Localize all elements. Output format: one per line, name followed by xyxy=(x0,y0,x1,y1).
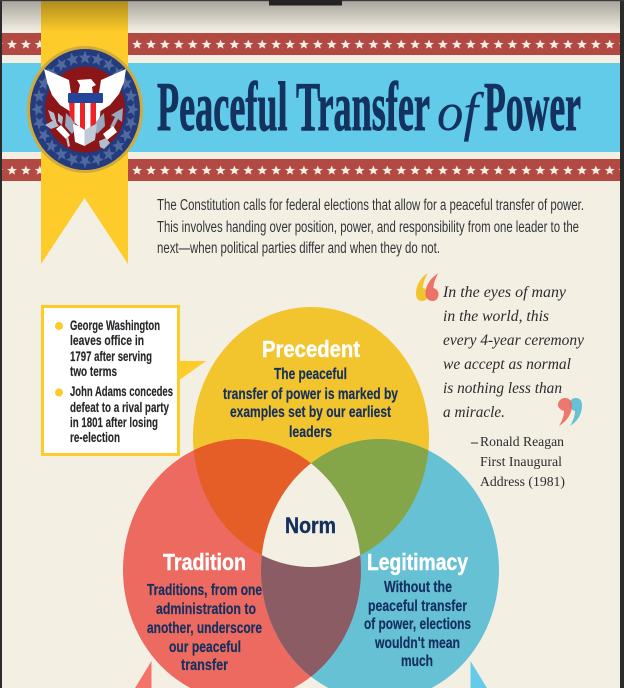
left wing xyxy=(44,69,71,112)
legitimacy text: much xyxy=(401,653,433,670)
legitimacy text: of power, elections xyxy=(364,616,471,633)
eagle xyxy=(44,69,126,149)
bullet: Adams: defeat to a rival party xyxy=(70,399,169,415)
norm label: Norm xyxy=(285,513,336,538)
gray talon feathers xyxy=(65,113,105,134)
bottom star stripe xyxy=(2,159,620,181)
tradition text: Tradition xyxy=(163,549,246,575)
closing quote mark xyxy=(558,398,582,426)
legitimacy text: peaceful transfer xyxy=(368,598,467,615)
legitimacy text xyxy=(364,549,471,670)
legitimacy text: Without the xyxy=(384,579,452,596)
seal ring stars xyxy=(31,51,139,168)
seal navy ring xyxy=(30,49,140,170)
shield stripes xyxy=(69,102,101,130)
precedent text xyxy=(223,336,398,441)
callout pointer xyxy=(178,361,206,381)
quote text xyxy=(442,284,585,421)
bottom red pointer xyxy=(135,661,152,688)
quote text: In the eyes of many xyxy=(442,284,567,301)
circle: tradition xyxy=(123,439,361,688)
quote attribution: – xyxy=(470,435,479,450)
tradition text: administration to xyxy=(156,601,256,618)
tradition text: our peaceful xyxy=(169,639,241,656)
quote text: every 4-year ceremony xyxy=(443,332,585,349)
circle: legitimacy xyxy=(261,439,499,688)
venn diagram xyxy=(123,307,499,688)
top star stripe xyxy=(2,33,620,55)
presidential seal xyxy=(27,46,143,173)
opening quote mark xyxy=(416,273,438,301)
tail xyxy=(73,124,84,146)
tradition text: Traditions, from one xyxy=(147,582,262,599)
yellow ribbon xyxy=(41,0,128,264)
tradition text xyxy=(147,549,262,674)
seal gold ring xyxy=(27,46,143,173)
precedent text: The peaceful xyxy=(274,366,347,383)
callout box xyxy=(42,306,178,454)
bottom blue pointer xyxy=(470,661,487,688)
bullet: Washington: 1797 after serving xyxy=(70,348,152,364)
seal red centre xyxy=(45,66,125,152)
legitimacy text: wouldn't mean xyxy=(374,635,460,652)
overlap: norm centre xyxy=(262,464,360,567)
quote attribution: Address (1981) xyxy=(480,475,565,490)
quote attribution: First Inaugural xyxy=(480,455,562,470)
olive branch stem xyxy=(56,125,70,139)
title banner band xyxy=(2,63,620,152)
quote text: in the world, this xyxy=(443,308,549,325)
precedent text: leaders xyxy=(289,424,332,441)
eagle head xyxy=(77,79,96,94)
quote attribution xyxy=(470,435,565,490)
precedent text: Precedent xyxy=(262,336,360,362)
tradition text: transfer xyxy=(181,657,228,674)
circle: precedent xyxy=(193,307,429,567)
olive branch leaves xyxy=(45,110,63,129)
right wing xyxy=(99,69,126,112)
overlap: precedent and tradition xyxy=(194,439,311,556)
title: of xyxy=(437,82,485,142)
quote text: a miracle. xyxy=(443,404,505,421)
tradition text: another, underscore xyxy=(147,620,262,637)
bullet: Adams: in 1801 after losing xyxy=(70,414,158,430)
top shadow xyxy=(2,2,620,32)
overlap: tradition and legitimacy xyxy=(261,464,361,676)
bullet: Washington xyxy=(55,317,160,379)
bullet: Washington: George Washington xyxy=(70,317,160,333)
quote attribution: Ronald Reagan xyxy=(480,435,564,450)
arrows xyxy=(110,108,123,129)
callout: examples xyxy=(42,306,206,454)
quote text: we accept as normal xyxy=(443,356,572,373)
bullet: Washington: two terms xyxy=(70,363,117,379)
bullet: Adams: re-election xyxy=(70,429,120,445)
quote text: is nothing less than xyxy=(443,380,562,397)
intro text xyxy=(157,197,584,257)
bullet: Adams xyxy=(55,383,173,445)
bullet: Washington: leaves office in xyxy=(70,332,144,348)
precedent text: examples set by our earliest xyxy=(230,404,392,421)
bullet: Adams: John Adams concedes xyxy=(70,383,173,399)
shield blue chief xyxy=(68,93,103,103)
overlap: precedent and legitimacy xyxy=(262,439,428,556)
legitimacy text: Legitimacy xyxy=(367,549,468,575)
precedent text: transfer of power is marked by xyxy=(223,386,398,403)
intro text: next—when political parties differ and when they do not. xyxy=(157,240,440,257)
